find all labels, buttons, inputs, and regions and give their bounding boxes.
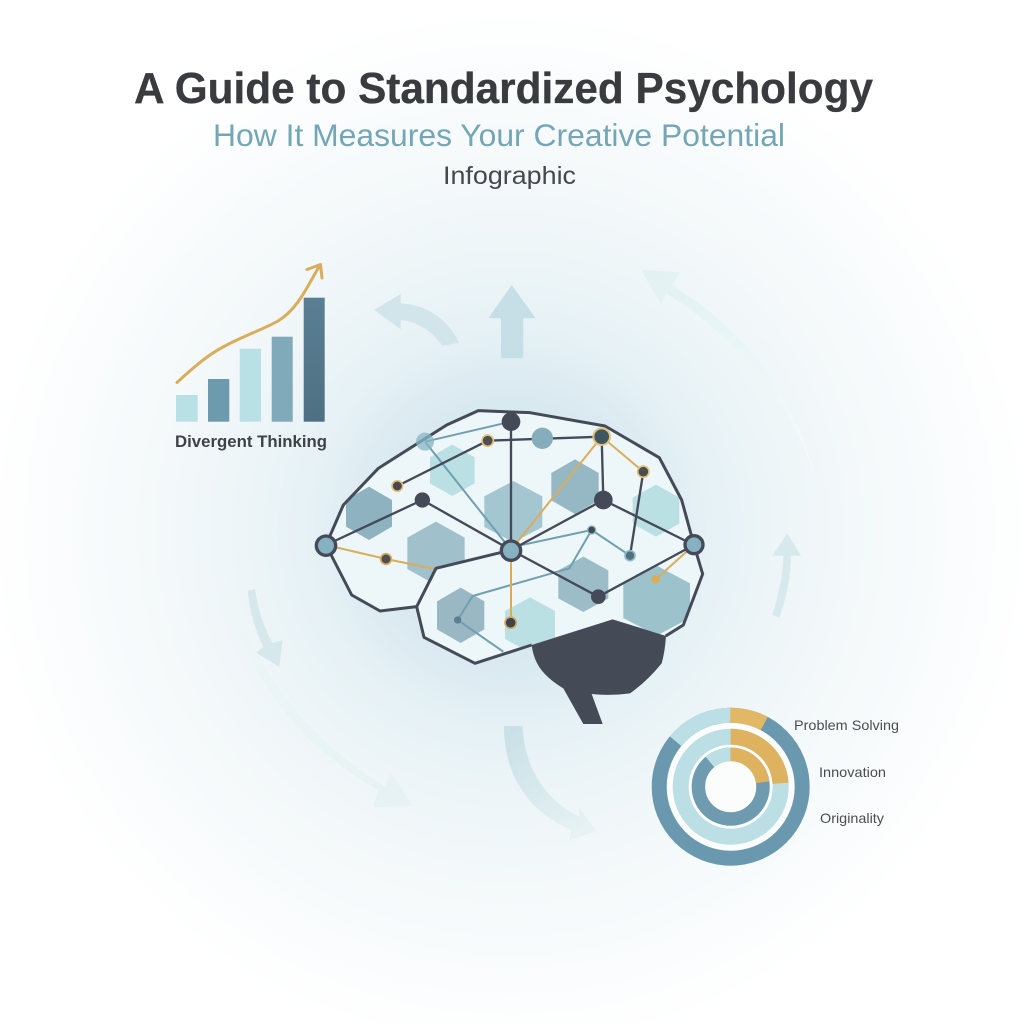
outer ring [630, 686, 831, 887]
brain outline [326, 411, 703, 663]
arrow: top up [488, 285, 536, 358]
arrow: small right up [772, 533, 801, 618]
lower hexagons [437, 557, 690, 653]
brain network [316, 411, 703, 724]
bar 2 [208, 379, 229, 422]
donut backing [653, 709, 809, 865]
arrow: large right arc [641, 270, 815, 477]
bar 4 [272, 337, 293, 422]
label: Divergent Thinking [175, 433, 327, 451]
dark connections [326, 422, 694, 597]
cerebellum and stem [532, 619, 666, 724]
label: originality: Originality [820, 810, 884, 826]
donut chart [630, 686, 831, 887]
teal connections [425, 422, 630, 652]
arrow: top left curved [374, 294, 459, 346]
trend arrow [177, 264, 322, 382]
inner ring [685, 741, 776, 832]
caption: infographic: Infographic [443, 162, 576, 190]
arrow: small left down [248, 589, 283, 667]
middle ring [681, 737, 781, 837]
upper hexagons [346, 445, 679, 585]
label: problem solving: Problem Solving [794, 717, 899, 733]
bar 3 [240, 349, 261, 422]
network nodes [316, 412, 703, 628]
bar 5 [304, 298, 325, 422]
arrow: large left arc [223, 571, 413, 807]
lower lobe fill [417, 545, 703, 663]
subtitle: How It Measures Your Creative Potential [213, 117, 785, 153]
brain upper fill [326, 411, 703, 663]
bar chart: divergent thinking [175, 264, 327, 451]
arrow: bottom curved [504, 726, 597, 841]
label: innovation: Innovation [819, 764, 886, 780]
gold connections [326, 437, 694, 623]
bar 1 [176, 395, 198, 422]
title: A Guide to Standardized Psychology [134, 64, 873, 113]
